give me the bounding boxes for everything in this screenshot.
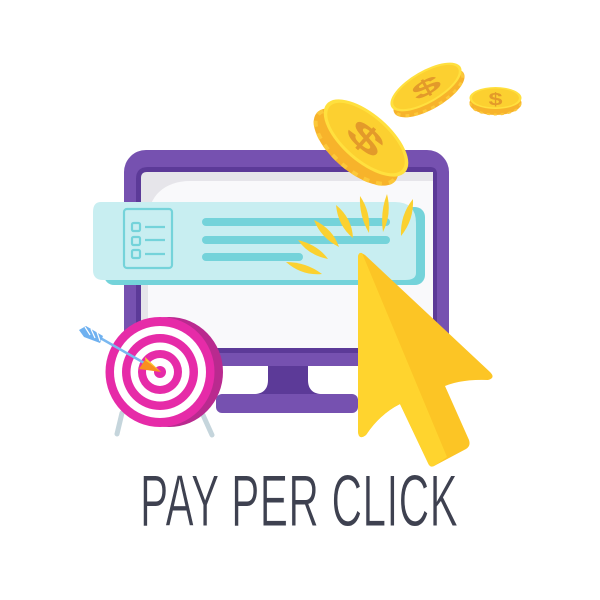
arrow shaft — [95, 335, 146, 364]
coin face — [383, 53, 469, 121]
monitor base — [216, 394, 358, 413]
target legs — [117, 413, 212, 435]
coin edge — [386, 59, 472, 127]
panel shadow — [104, 207, 425, 285]
screen — [141, 172, 433, 348]
cursor left side — [358, 253, 447, 467]
medium coin — [383, 53, 472, 127]
cursor right side — [358, 253, 493, 467]
screen shadow edge — [136, 167, 437, 353]
large coin — [301, 86, 421, 199]
text lines — [202, 218, 390, 261]
arrowhead — [145, 357, 161, 372]
cursor arrow — [358, 253, 493, 467]
target — [79, 317, 223, 435]
panel body — [93, 202, 416, 280]
click sparkles — [286, 194, 413, 274]
icon: checklist document — [124, 209, 172, 268]
arrow in target — [79, 326, 161, 372]
monitor stand — [254, 364, 322, 394]
coin face — [311, 86, 421, 190]
monitor frame — [124, 150, 449, 366]
target side — [115, 317, 223, 427]
coin face — [470, 87, 522, 109]
dollar sign: $ — [407, 69, 445, 106]
arrow fletching — [79, 326, 103, 343]
ad panel — [93, 202, 425, 285]
monitor — [124, 150, 449, 413]
target rings — [114, 326, 206, 418]
title: PAY PER CLICK — [140, 460, 458, 542]
screen highlight — [148, 181, 433, 348]
small coin — [470, 87, 522, 115]
coin edge — [470, 91, 522, 115]
dollar sign: $ — [339, 111, 393, 165]
coin edge — [301, 95, 411, 199]
dollar sign: $ — [488, 89, 503, 109]
